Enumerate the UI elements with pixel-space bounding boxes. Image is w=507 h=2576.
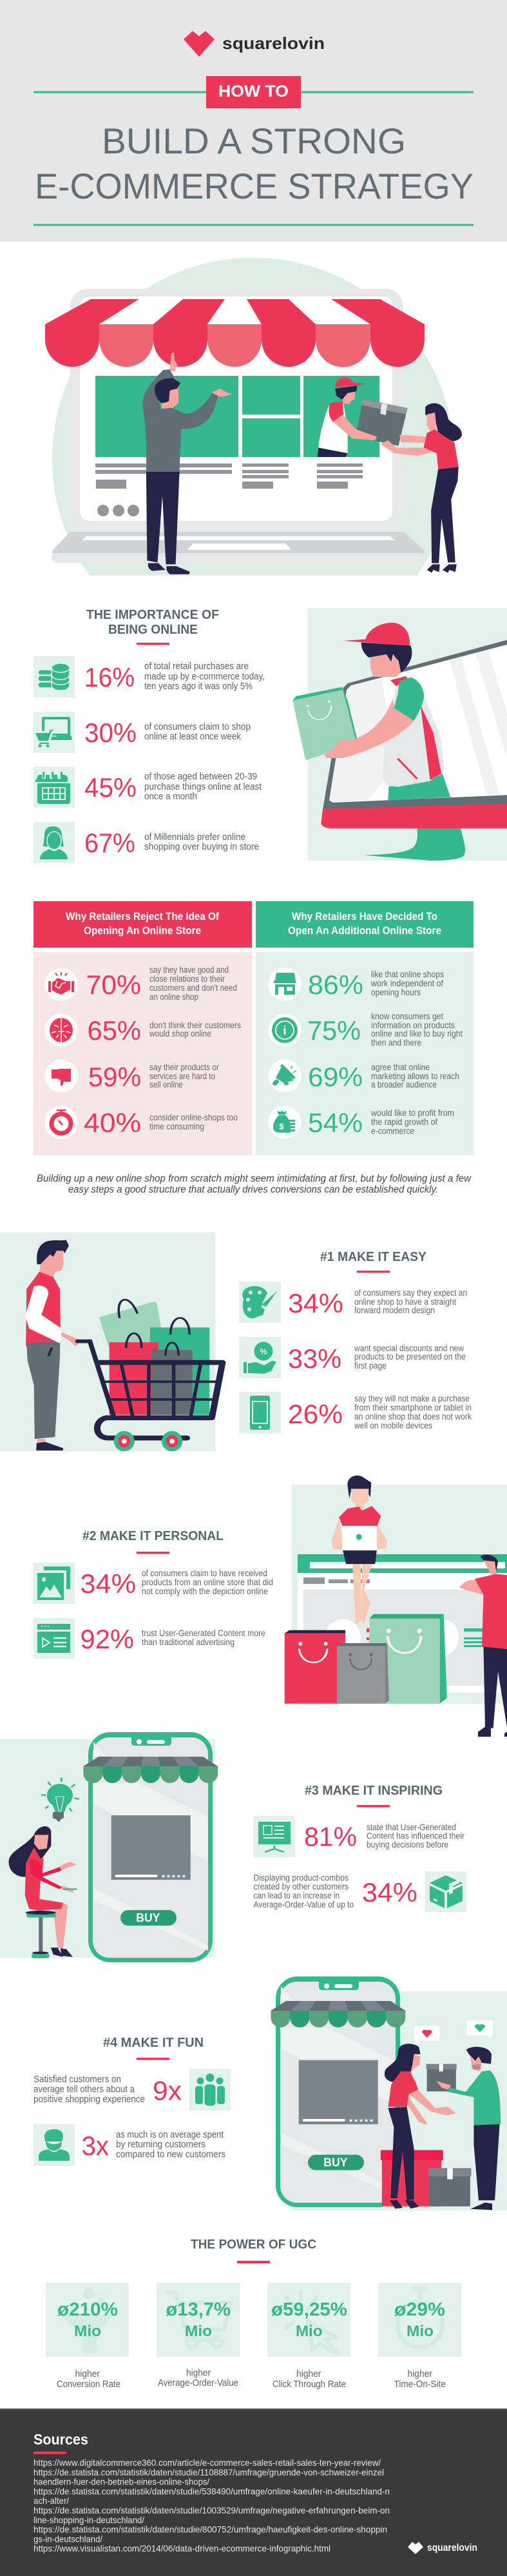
text: first page [354, 1361, 387, 1371]
icon: laptop and cart [35, 717, 72, 748]
text [371, 1011, 463, 1048]
icon: discount in hand [244, 1342, 276, 1374]
ugc card: conversion rate: Mio [74, 2323, 101, 2340]
header panel [0, 0, 507, 242]
stat 16 percent: 16% [84, 662, 135, 692]
icon: pictures [37, 1566, 70, 1600]
icon: smartphone [250, 1396, 270, 1430]
title: E-COMMERCE STRATEGY [35, 166, 474, 206]
phone [271, 1976, 405, 2207]
text [370, 1108, 454, 1136]
text: not comply with the depiction online [142, 1586, 268, 1596]
text: created by other customers [254, 1882, 349, 1891]
section: #1 make it easy [239, 1250, 472, 1434]
text: from their smartphone or tablet in [354, 1403, 472, 1412]
text: an online shop [149, 992, 198, 1002]
section: the power of ugc: THE POWER OF UGC [191, 2238, 316, 2252]
gift boxes [381, 2150, 471, 2207]
stat 9x: 9x [153, 2076, 182, 2106]
seated woman [8, 1826, 77, 1958]
logo: squarelovin: squarelovin [222, 34, 325, 53]
text [370, 970, 444, 997]
source list: https://de.statista.com/statistik/daten/studie/1108887/umfrage/gruende-von-schweizer-einzel [33, 2467, 384, 2477]
speech bubbles with hearts [414, 2020, 493, 2044]
stat 67 percent [33, 822, 259, 863]
ugc card: average order value [157, 2283, 240, 2388]
icon: funnel watermark [59, 2288, 113, 2353]
reason 69 percent [268, 1060, 459, 1092]
stat 9x [33, 2069, 231, 2111]
text: customers and don't need [149, 983, 237, 993]
text: products to be presented on the [354, 1352, 466, 1361]
stat 81 percent [254, 1816, 464, 1857]
footer: sources: Sources [33, 2431, 88, 2448]
text: of consumers claim to have received [142, 1568, 267, 1578]
text: would shop online [149, 1029, 211, 1039]
logo: squarelovin [184, 31, 325, 57]
stat 45 percent [33, 766, 262, 808]
text: positive shopping experience [33, 2094, 145, 2105]
text: trust User-Generated Content more [142, 1628, 265, 1638]
text: e-commerce [371, 1126, 414, 1136]
text: of consumers claim to shop [144, 721, 251, 732]
icon: cart watermark [165, 2292, 231, 2347]
text [144, 661, 265, 692]
text: close relations to their [149, 974, 225, 984]
text: an online shop that does not work [354, 1412, 472, 1421]
illustration: customers on web page with bags [285, 1476, 507, 1737]
caption: Click Through Rate [273, 2379, 346, 2390]
icon: megaphone [272, 1064, 296, 1087]
stat 67 percent: 67% [84, 828, 135, 858]
text [144, 721, 251, 742]
web page [298, 1554, 507, 1693]
text: the rapid growth of [371, 1117, 437, 1127]
intro paragraph: Building up a new online shop from scratch might seem intimidating at first, but by following just a few [37, 1173, 472, 1184]
icon: information [272, 1017, 298, 1043]
text: then and there [371, 1038, 421, 1048]
text [149, 1113, 238, 1131]
panel: why retailers reject [33, 901, 252, 1155]
logo: squarelovin white: squarelovin [427, 2542, 477, 2553]
stat 34 percent: 34% [362, 1877, 417, 1908]
source list [33, 2457, 390, 2553]
ugc card: click through rate [267, 2283, 350, 2390]
panel heading [288, 910, 441, 937]
text: products from an online store that did [142, 1577, 273, 1587]
icon: presentation board [258, 1822, 291, 1852]
text [367, 1822, 464, 1849]
illustration: courier stepping out of monitor [292, 608, 507, 861]
reason 75 percent [268, 1011, 463, 1048]
source list: https://www.visualistan.com/2014/06/data-driven-ecommerce-infographic.html [33, 2543, 330, 2553]
how to badge [206, 76, 301, 108]
stat 26 percent: 26% [288, 1399, 343, 1429]
caption: higher [407, 2369, 432, 2379]
icon: group of people [195, 2073, 225, 2106]
text: agree that online [371, 1062, 430, 1072]
icon: calendar [35, 772, 70, 804]
text: would like to profit from [370, 1108, 454, 1118]
reason 65 percent: 65% [88, 1015, 141, 1046]
how to badge: HOW TO [218, 83, 289, 101]
intro paragraph: easy steps a good structure that actually drives conversions can be established quickly. [68, 1184, 438, 1195]
caption: Time-On-Site [394, 2379, 446, 2390]
illustration: phone shop with inspired woman [0, 1732, 218, 1962]
courier [343, 623, 450, 801]
icon: coins [38, 663, 70, 690]
section: #1 make it easy: #1 MAKE IT EASY [320, 1250, 427, 1264]
man pointing at the shop [142, 352, 232, 574]
text: information on products [371, 1020, 455, 1030]
stat 3x: 3x [81, 2131, 109, 2161]
section: #3 make it inspiring [254, 1784, 466, 1912]
panel heading: Why Retailers Reject The Idea Of [66, 910, 219, 922]
text [354, 1288, 467, 1315]
text [142, 1568, 273, 1596]
caption: higher [296, 2369, 321, 2379]
source list: https://de.statista.com/statistik/daten/studie/800752/umfrage/haeufigkeit-des-online-shoppin [33, 2524, 387, 2535]
caption: Conversion Rate [57, 2379, 120, 2390]
shopping bags [99, 1300, 209, 1415]
text [149, 1020, 241, 1039]
ugc card: click through rate: ø59,25% [271, 2299, 347, 2320]
ugc card: average order value: Mio [185, 2323, 212, 2340]
section: #3 make it inspiring: #3 MAKE IT INSPIRING [305, 1784, 443, 1798]
section: #2 make it personal: #2 MAKE IT PERSONAL [82, 1529, 224, 1543]
section: #4 make it fun [33, 2036, 231, 2166]
reason 59 percent: 59% [88, 1062, 141, 1092]
icon: information: i [283, 1024, 287, 1038]
text: as much is on average spent [116, 2129, 224, 2140]
awning [45, 299, 425, 367]
heading: BEING ONLINE [108, 623, 198, 637]
caption: higher [75, 2369, 100, 2379]
logo: squarelovin white [408, 2542, 477, 2554]
laptop [52, 289, 425, 563]
reason 40 percent [45, 1106, 238, 1138]
reason 86 percent [268, 968, 444, 1000]
text [354, 1343, 466, 1371]
icon: returning customer [39, 2129, 70, 2161]
text [144, 771, 262, 802]
text: online at least once week [144, 731, 241, 742]
reason 40 percent: 40% [84, 1107, 141, 1138]
text: buying decisions before [367, 1840, 448, 1849]
ugc card: click through rate: Mio [296, 2323, 322, 2340]
text: average tell others about a [33, 2084, 135, 2095]
source list: line-shopping-in-deutschland/ [33, 2515, 144, 2525]
panel heading: Opening An Online Store [84, 924, 201, 937]
illustration: couple exchanging parcel by phone shop [271, 1976, 507, 2210]
heading: THE IMPORTANCE OF [86, 608, 219, 622]
title: BUILD A STRONG [102, 121, 406, 161]
shop window panels [95, 376, 379, 457]
icon: money bag [273, 1111, 295, 1133]
text: work independent of [370, 979, 443, 988]
ugc card: conversion rate: ø210% [57, 2299, 118, 2320]
phone: ★★★★★ [161, 1873, 187, 1879]
panel heading: Open An Additional Online Store [288, 924, 441, 937]
stat 34 percent: 34% [288, 1288, 343, 1318]
source list: https://de.statista.com/statistik/daten/studie/538490/umfrage/online-kaeufer-in-deutschland-n [33, 2486, 390, 2496]
stat 30 percent: 30% [84, 717, 137, 748]
reason 65 percent [45, 1013, 241, 1047]
stat 81 percent: 81% [304, 1822, 357, 1851]
icon: video page [37, 1624, 70, 1653]
text: forward modern design [354, 1305, 435, 1315]
text [149, 1062, 219, 1089]
icon: money bag: $ [279, 1122, 284, 1131]
shopping cart [77, 1342, 222, 1438]
panel: why retailers decided [256, 901, 474, 1155]
text: ten years ago it was only 5% [144, 681, 253, 692]
text: compared to new customers [116, 2149, 225, 2160]
text: say they will not make a purchase [354, 1394, 470, 1403]
ugc card: average order value: ø13,7% [166, 2299, 231, 2320]
text: don't think their customers [149, 1020, 241, 1030]
ugc card: time on site [378, 2283, 461, 2390]
ugc card: time on site: ø29% [394, 2299, 445, 2320]
icon: parcel [430, 1875, 463, 1908]
reason 75 percent: 75% [307, 1015, 361, 1046]
stat 3x [33, 2124, 225, 2166]
reason 70 percent: 70% [86, 970, 141, 1000]
text: a broader audience [371, 1080, 437, 1089]
ugc card: conversion rate [46, 2283, 129, 2390]
text: state that User-Generated [367, 1822, 456, 1832]
text [142, 1628, 265, 1647]
reason 86 percent: 86% [308, 970, 363, 1000]
stat 16 percent [33, 656, 265, 698]
reason 54 percent: 54% [308, 1107, 363, 1138]
stat 92 percent: 92% [80, 1624, 134, 1654]
text: shopping over buying in store [144, 841, 259, 852]
text: online and like to buy right [371, 1029, 463, 1039]
source list: gs-in-deutschland/ [33, 2533, 102, 2544]
title [35, 121, 474, 206]
text: Average-Order-Value of up to [254, 1900, 354, 1909]
stat 45 percent: 45% [84, 772, 137, 803]
stat 33 percent [239, 1337, 466, 1378]
icon: palette and brush [242, 1286, 277, 1318]
text: services are hard to [149, 1071, 215, 1081]
footer: sources [0, 2408, 507, 2576]
intro paragraph [37, 1173, 472, 1195]
stat 33 percent: 33% [288, 1343, 341, 1374]
heading [86, 608, 219, 637]
text [354, 1394, 472, 1430]
icon: woman [40, 826, 68, 859]
stat 34 percent [239, 1282, 467, 1323]
stat 34 percent [254, 1871, 466, 1912]
text [371, 1062, 459, 1089]
section: #4 make it fun: #4 MAKE IT FUN [103, 2036, 204, 2050]
woman sitting with laptop [332, 1476, 387, 1625]
ugc card: time on site: Mio [407, 2323, 434, 2340]
phone: BUY [136, 1911, 160, 1924]
text [144, 832, 259, 852]
section: #2 make it personal [33, 1529, 273, 1659]
man leaning on page [459, 1555, 507, 1737]
text: sell online [149, 1080, 183, 1089]
text: marketing allows to reach [371, 1071, 459, 1081]
caption: higher [186, 2368, 211, 2379]
text: of those aged between 20-39 [144, 771, 257, 782]
text: opening hours [371, 988, 421, 997]
monitor [321, 640, 507, 861]
text: know consumers get [371, 1011, 443, 1021]
shopper [25, 1240, 79, 1450]
caption [394, 2369, 446, 2390]
caption [273, 2369, 346, 2390]
text [254, 1873, 354, 1909]
text: well on mobile devices [354, 1421, 432, 1430]
text: of Millennials prefer online [144, 832, 245, 843]
phone: BUY [323, 2156, 348, 2169]
man with parcel [426, 2047, 501, 2210]
icon: stopwatch watermark [397, 2288, 443, 2347]
illustration: shopper with cart [0, 1233, 222, 1451]
icon: handshake [48, 972, 74, 995]
stat 26 percent [239, 1392, 472, 1434]
text: once a month [144, 791, 197, 802]
source list: https://de.statista.com/statistik/daten/studie/1003529/umfrage/negative-erfahrungen-beim-on [33, 2505, 390, 2515]
text: say they have good and [149, 965, 229, 975]
woman receiving parcel [380, 403, 462, 573]
section: the importance of being online [33, 608, 265, 863]
text [116, 2129, 225, 2160]
text: by returning customers [116, 2139, 206, 2150]
icon: store [274, 973, 296, 995]
panel heading: Why Retailers Have Decided To [292, 910, 437, 922]
stat 30 percent [33, 712, 251, 753]
reason 69 percent: 69% [308, 1062, 363, 1092]
woman [385, 2044, 456, 2209]
text: made up by e-commerce today, [144, 671, 265, 682]
reason 54 percent [268, 1106, 454, 1138]
icon: thumbs down [52, 1069, 71, 1086]
icon: light bulb [41, 1778, 79, 1822]
caption [158, 2368, 238, 2388]
text: Content has influenced their [367, 1831, 464, 1841]
text [149, 965, 237, 1002]
caption [57, 2369, 120, 2390]
caption: Average-Order-Value [158, 2378, 238, 2388]
icon: discount in hand: % [260, 1347, 267, 1356]
phone [84, 1732, 218, 1962]
reason 59 percent [45, 1060, 219, 1092]
text: Displaying product-combos [254, 1873, 349, 1882]
source list: haendlern-fuer-den-betrieb-eines-online-shops/ [33, 2477, 209, 2487]
icon: brain [50, 1018, 73, 1042]
courier arm [324, 698, 414, 758]
reason 70 percent [45, 965, 237, 1002]
stat 34 percent [33, 1563, 273, 1604]
smiling bags [285, 1614, 447, 1704]
text: say their products or [149, 1062, 219, 1072]
source list: https://www.digitalcommerce360.com/article/e-commerce-sales-retail-sales-ten-year-review/ [33, 2457, 381, 2468]
icon: click watermark [285, 2290, 336, 2352]
text: of total retail purchases are [144, 661, 249, 672]
text [33, 2074, 145, 2105]
wheels [114, 1431, 182, 1451]
text: time consuming [149, 1122, 204, 1131]
stat 92 percent [33, 1618, 265, 1659]
text: consider online-shops too [149, 1113, 238, 1122]
source list: ach-alter/ [33, 2495, 69, 2506]
stat 34 percent: 34% [80, 1568, 136, 1599]
icon: stopwatch [52, 1109, 71, 1133]
text: want special discounts and new [354, 1343, 464, 1353]
text: like that online shops [371, 970, 444, 979]
shopping bag [292, 687, 358, 760]
text: of consumers say they expect an [354, 1288, 467, 1298]
phone: ★★★★★ [348, 2118, 374, 2123]
delivery man with parcel [317, 378, 408, 457]
text: online shop to have a straight [354, 1297, 456, 1307]
text: than traditional advertising [142, 1637, 234, 1647]
hero illustration: online storefront [45, 258, 462, 576]
text: purchase things online at least [144, 781, 262, 792]
product text placeholders [95, 463, 363, 516]
section: the power of ugc [46, 2238, 461, 2390]
text: can lead to an increase in [254, 1891, 340, 1900]
text: Satisfied customers on [33, 2074, 121, 2085]
panel heading [66, 910, 219, 937]
